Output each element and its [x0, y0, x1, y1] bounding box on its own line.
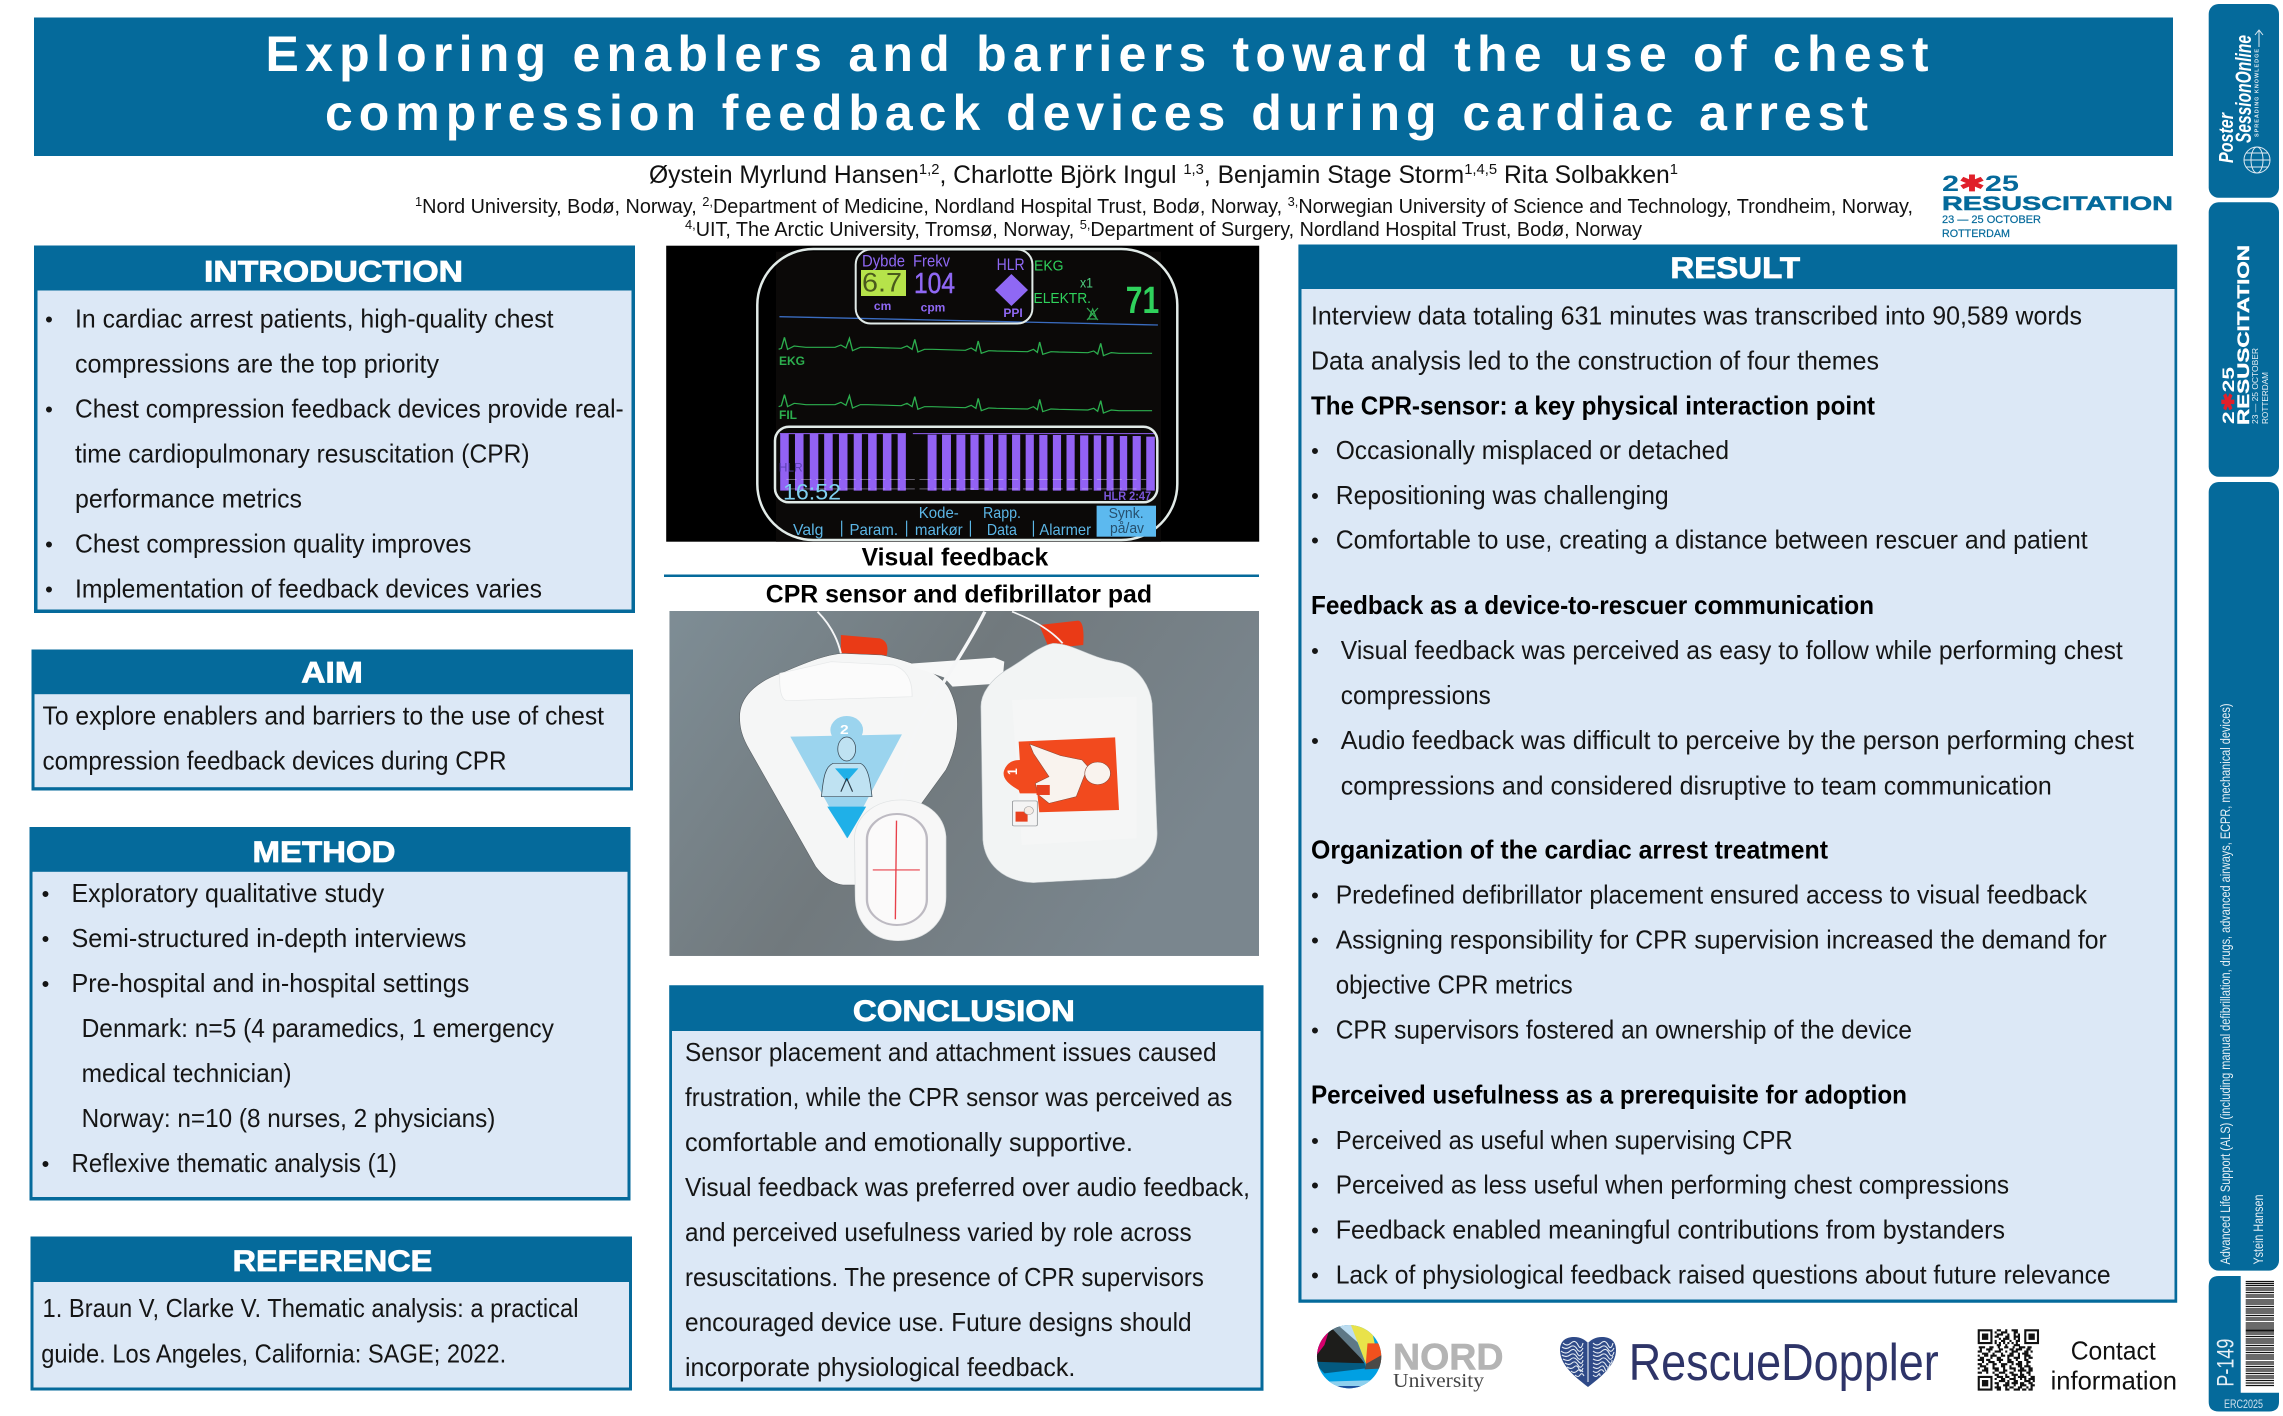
text block: interview data: Interview data totaling 631 minutes was transcribed into 90,589 words	[1311, 301, 2082, 331]
theme 4: perceived usefulness: Perceived as useful when supervising CPR	[1336, 1125, 1793, 1155]
text block: aim: compression feedback devices during CPR	[42, 746, 506, 776]
heading: conclusion: CONCLUSION	[853, 995, 1075, 1028]
ecg readouts: EKG	[1034, 258, 1064, 275]
photo: cpr sensor and defibrillator pads	[669, 611, 1259, 956]
logo: nord university: University	[1393, 1370, 1484, 1392]
text block: introduction bullets: •	[45, 532, 53, 557]
monitor menu: Synk.	[1109, 505, 1144, 522]
text block: introduction bullets: time cardiopulmonary resuscitation (CPR)	[75, 439, 530, 469]
theme 2: feedback as communication: Visual feedback was perceived as easy to follow while performing chest	[1341, 635, 2124, 665]
heading: result: RESULT	[1670, 252, 1800, 285]
depth and rate readouts	[861, 252, 1028, 320]
panel: result	[1298, 244, 2177, 1303]
side tab: poster number and barcode	[2209, 1276, 2279, 1412]
theme 4: perceived usefulness: •	[1311, 1128, 1319, 1154]
text block: introduction bullets: Chest compression quality improves	[75, 529, 471, 559]
theme 1: the cpr-sensor: •	[1311, 528, 1319, 553]
theme 1: the cpr-sensor: Comfortable to use, creating a distance between rescuer and patient	[1336, 525, 2088, 555]
panel: method	[30, 827, 630, 1200]
text block: conclusion: resuscitations. The presence of CPR supervisors	[685, 1262, 1204, 1292]
monitor menu: Param.	[850, 522, 898, 539]
right pad	[981, 643, 1157, 883]
text block: method bullets: medical technician)	[82, 1058, 292, 1088]
ecg readouts: EKG	[779, 354, 805, 368]
ecg readouts: FIL	[779, 408, 797, 422]
text block: method bullets: •	[42, 972, 49, 996]
text block: conclusion: comfortable and emotionally supportive.	[685, 1127, 1133, 1157]
title banner: compression feedback devices during cardiac arrest	[325, 85, 1868, 141]
authors: , Charlotte Björk Ingul	[939, 161, 1183, 189]
authors: 1,2	[919, 161, 939, 178]
theme 3: organization of treatment: •	[1311, 1018, 1319, 1043]
theme 2: feedback as communication: compressions and considered disruptive to team communication	[1341, 770, 2052, 800]
side tab: topic and author: Advanced Life Support (ALS) (including manual defibrillation, drugs, advanced airways, ECPR, mechanical devices)	[2217, 704, 2233, 1264]
text block: aim: To explore enablers and barriers to the use of chest	[42, 700, 605, 730]
caption: visual feedback: Visual feedback	[862, 544, 1048, 572]
authors: 1,3	[1183, 161, 1204, 178]
barcode	[2246, 1282, 2274, 1386]
monitor menu: Data	[987, 522, 1017, 539]
depth and rate readouts: PPI	[1003, 306, 1023, 320]
monitor menu: Kode-	[919, 505, 959, 522]
chart labels: 16:52	[783, 479, 841, 504]
panel: reference	[30, 1236, 632, 1390]
theme 4: perceived usefulness: Lack of physiological feedback raised questions about future relevance	[1336, 1259, 2111, 1289]
logo: 2025 Resuscitation	[1942, 171, 2173, 240]
text block: method bullets: Exploratory qualitative study	[72, 878, 384, 908]
authors: Øystein Myrlund Hansen	[649, 161, 923, 189]
logo: 2025 Resuscitation: ROTTERDAM	[1942, 228, 2010, 240]
logo: 2025 Resuscitation: 23 — 25 OCTOBER	[1942, 214, 2041, 226]
logo: 2025 Resuscitation: 2✱ 25	[1942, 171, 2019, 196]
text block: introduction bullets: •	[45, 307, 53, 332]
theme 4: perceived usefulness: •	[1311, 1173, 1319, 1198]
theme 4: perceived usefulness	[1311, 1080, 2111, 1289]
text block: introduction bullets: Chest compression feedback devices provide real-	[75, 394, 624, 424]
text block: introduction bullets	[45, 304, 624, 604]
photo: defibrillator monitor with visual feedback	[666, 246, 1259, 542]
affiliations: UIT, The Arctic University, Tromsø, Norway,	[696, 219, 1080, 241]
logo: 2025 Resuscitation: RESUSCITATION	[1942, 194, 2173, 215]
monitor menu: på/av	[1110, 520, 1144, 537]
theme 2: feedback as communication: •	[1311, 638, 1319, 664]
theme 1: the cpr-sensor: Occasionally misplaced or detached	[1336, 435, 1729, 465]
theme 2: feedback as communication: compressions	[1341, 680, 1491, 710]
side tab: resuscitation: ROTTERDAM	[2260, 372, 2270, 424]
feedback highlight frames	[757, 249, 1177, 540]
contact information label	[2051, 1336, 2177, 1396]
affiliations: 2,	[702, 194, 713, 209]
theme 2: feedback as communication: Feedback as a device-to-rescuer communication	[1311, 590, 1874, 620]
contact information label: Contact	[2071, 1336, 2156, 1366]
monitor menu	[793, 505, 1156, 539]
caption: cpr sensor and pad: CPR sensor and defibrillator pad	[766, 581, 1152, 609]
side tab: poster number and barcode: P-149	[2212, 1339, 2240, 1387]
text block: method bullets	[42, 878, 554, 1178]
text block: method bullets: Reflexive thematic analysis (1)	[72, 1148, 397, 1178]
connector strap	[905, 658, 1004, 687]
theme 4: perceived usefulness: Perceived usefulness as a prerequisite for adoption	[1311, 1080, 1907, 1110]
affiliations: Nord University, Bodø, Norway,	[422, 196, 702, 218]
affiliations: 3,	[1288, 194, 1298, 209]
heading: aim: AIM	[301, 657, 363, 690]
cpr bars and ecg traces	[779, 317, 1158, 537]
theme 4: perceived usefulness: Feedback enabled meaningful contributions from bystanders	[1336, 1215, 2005, 1245]
right pad: 1	[1004, 768, 1020, 775]
text block: conclusion: Sensor placement and attachment issues caused	[685, 1037, 1216, 1067]
title banner: Exploring enablers and barriers toward the use of chest	[266, 26, 1929, 82]
globe and arrow	[2244, 30, 2270, 173]
text block: method bullets: •	[42, 1152, 49, 1176]
depth and rate readouts: 104	[914, 268, 955, 300]
left pad	[740, 653, 957, 885]
theme 1: the cpr-sensor: •	[1311, 484, 1319, 508]
ecg readouts: 71	[1126, 280, 1159, 322]
contact information label: information	[2051, 1366, 2177, 1396]
theme 1: the cpr-sensor	[1311, 390, 2088, 555]
panel: aim	[32, 650, 633, 790]
depth and rate readouts: 6.7	[862, 268, 902, 298]
text block: reference: 1. Braun V, Clarke V. Thematic analysis: a practical	[42, 1293, 578, 1323]
text block: introduction bullets: performance metrics	[75, 484, 302, 514]
side tab: topic and author	[2209, 482, 2279, 1271]
text block: aim	[42, 700, 605, 776]
monitor menu: Alarmer	[1039, 522, 1092, 539]
text block: introduction bullets: •	[45, 577, 53, 602]
theme 1: the cpr-sensor: The CPR-sensor: a key physical interaction point	[1311, 390, 1875, 420]
logo: nord university	[1313, 1323, 1504, 1392]
theme 4: perceived usefulness: •	[1311, 1263, 1319, 1288]
depth and rate readouts: cm	[874, 299, 891, 313]
text block: method bullets: Norway: n=10 (8 nurses, 2 physicians)	[82, 1103, 495, 1133]
text block: method bullets: •	[42, 926, 49, 952]
text block: method bullets: Denmark: n=5 (4 paramedics, 1 emergency	[82, 1013, 554, 1043]
side tab: poster session online: SPREADING KNOWLEDGE	[2254, 49, 2260, 137]
monitor menu: Rapp.	[983, 505, 1021, 522]
text block: introduction bullets: compressions are the top priority	[75, 349, 439, 379]
affiliations: 5,	[1080, 217, 1090, 232]
theme 3: organization of treatment: •	[1311, 883, 1319, 908]
text block: conclusion: and perceived usefulness varied by role across	[685, 1217, 1192, 1247]
text block: method bullets: Pre-hospital and in-hospital settings	[72, 968, 469, 998]
text block: introduction bullets: In cardiac arrest patients, high-quality chest	[75, 304, 554, 334]
theme 3: organization of treatment: Organization of the cardiac arrest treatment	[1311, 834, 1828, 864]
logo: rescuedoppler: RescueDoppler	[1629, 1334, 1939, 1392]
text block: introduction bullets: •	[45, 397, 53, 422]
text block: conclusion	[685, 1037, 1250, 1382]
heart brain icon	[1560, 1337, 1616, 1387]
side tab: resuscitation: RESUSCITATION	[2234, 245, 2253, 425]
side tab: poster number and barcode: ERC2025	[2224, 1397, 2263, 1411]
text block: method bullets: Semi-structured in-depth interviews	[72, 923, 466, 953]
affiliations: Department of Medicine, Nordland Hospital Trust, Bodø, Norway,	[713, 196, 1288, 218]
text block: conclusion: encouraged device use. Future designs should	[685, 1307, 1192, 1337]
text block: interview data	[1311, 301, 2082, 375]
left pad: 2	[840, 723, 849, 738]
cpr sensor puck	[854, 800, 946, 941]
monitor menu: Valg	[793, 522, 823, 539]
heading: method: METHOD	[252, 836, 396, 869]
chart labels: HLR	[779, 461, 803, 475]
text block: interview data: Data analysis led to the construction of four themes	[1311, 345, 1879, 375]
theme 3: organization of treatment: objective CPR metrics	[1336, 970, 1573, 1000]
text block: introduction bullets: Implementation of feedback devices varies	[75, 574, 542, 604]
authors: 1	[1670, 161, 1678, 178]
theme 3: organization of treatment: CPR supervisors fostered an ownership of the device	[1336, 1014, 1912, 1044]
heading: reference: REFERENCE	[233, 1245, 432, 1278]
title banner	[34, 18, 2173, 156]
side tab: resuscitation: 23 — 25 OCTOBER	[2250, 348, 2260, 424]
logo: nord university: NORD	[1393, 1336, 1504, 1378]
heading: introduction: INTRODUCTION	[204, 256, 463, 288]
theme 1: the cpr-sensor: •	[1311, 438, 1319, 464]
text block: method bullets: •	[42, 882, 49, 906]
ecg readouts	[779, 258, 1159, 422]
qr code	[1978, 1329, 2039, 1391]
chart labels: HLR 2:47	[1104, 489, 1151, 503]
theme 4: perceived usefulness: •	[1311, 1218, 1319, 1243]
affiliations: 1	[415, 194, 422, 209]
side tab: resuscitation	[2209, 202, 2279, 477]
theme 3: organization of treatment: •	[1311, 928, 1319, 953]
theme 3: organization of treatment: Assigning responsibility for CPR supervision increased the demand for	[1336, 924, 2107, 954]
text block: reference	[41, 1293, 578, 1368]
side tab: poster session online	[2209, 4, 2279, 198]
theme 3: organization of treatment: Predefined defibrillator placement ensured access to visual feedback	[1336, 879, 2088, 909]
theme 2: feedback as communication: •	[1311, 728, 1319, 754]
theme 2: feedback as communication	[1311, 590, 2135, 800]
authors: Rita Solbakken	[1497, 161, 1670, 189]
depth and rate readouts: Dybde	[862, 252, 905, 271]
theme 3: organization of treatment	[1311, 834, 2107, 1044]
text block: conclusion: frustration, while the CPR sensor was perceived as	[685, 1082, 1232, 1112]
text block: reference: guide. Los Angeles, California: SAGE; 2022.	[41, 1338, 506, 1368]
depth and rate readouts: cpm	[921, 301, 945, 315]
affiliations: 4,	[685, 217, 696, 232]
side tab: resuscitation: 2✱25	[2219, 367, 2238, 424]
theme 2: feedback as communication: Audio feedback was difficult to perceive by the person performing chest	[1341, 725, 2135, 755]
affiliations	[415, 194, 1913, 241]
text block: conclusion: Visual feedback was preferred over audio feedback,	[685, 1172, 1250, 1202]
nord emblem	[1316, 1325, 1382, 1388]
chart labels	[779, 461, 1151, 504]
affiliations: Department of Surgery, Nordland Hospital Trust, Bodø, Norway	[1090, 219, 1642, 241]
affiliations: Norwegian University of Science and Technology, Trondheim, Norway,	[1298, 196, 1913, 218]
ecg readouts: ELEKTR.	[1034, 290, 1091, 307]
theme 1: the cpr-sensor: Repositioning was challenging	[1336, 480, 1669, 510]
red pad tabs	[841, 621, 1084, 657]
panel: conclusion	[669, 985, 1264, 1391]
authors: 1,4,5	[1464, 161, 1497, 178]
ecg readouts: x1	[1080, 275, 1093, 291]
monitor menu: markør	[915, 522, 963, 539]
side tab: topic and author: Ystein Hansen	[2250, 1194, 2266, 1264]
panel: introduction	[34, 246, 635, 613]
side tab: poster session online: Poster	[2216, 112, 2238, 163]
text block: conclusion: incorporate physiological feedback.	[685, 1352, 1075, 1382]
depth and rate readouts: Frekv	[913, 252, 950, 271]
authors: , Benjamin Stage Storm	[1204, 161, 1464, 189]
sensor cables	[816, 611, 1064, 684]
theme 4: perceived usefulness: Perceived as less useful when performing chest compressions	[1336, 1170, 2009, 1200]
depth and rate readouts: HLR	[997, 255, 1025, 274]
